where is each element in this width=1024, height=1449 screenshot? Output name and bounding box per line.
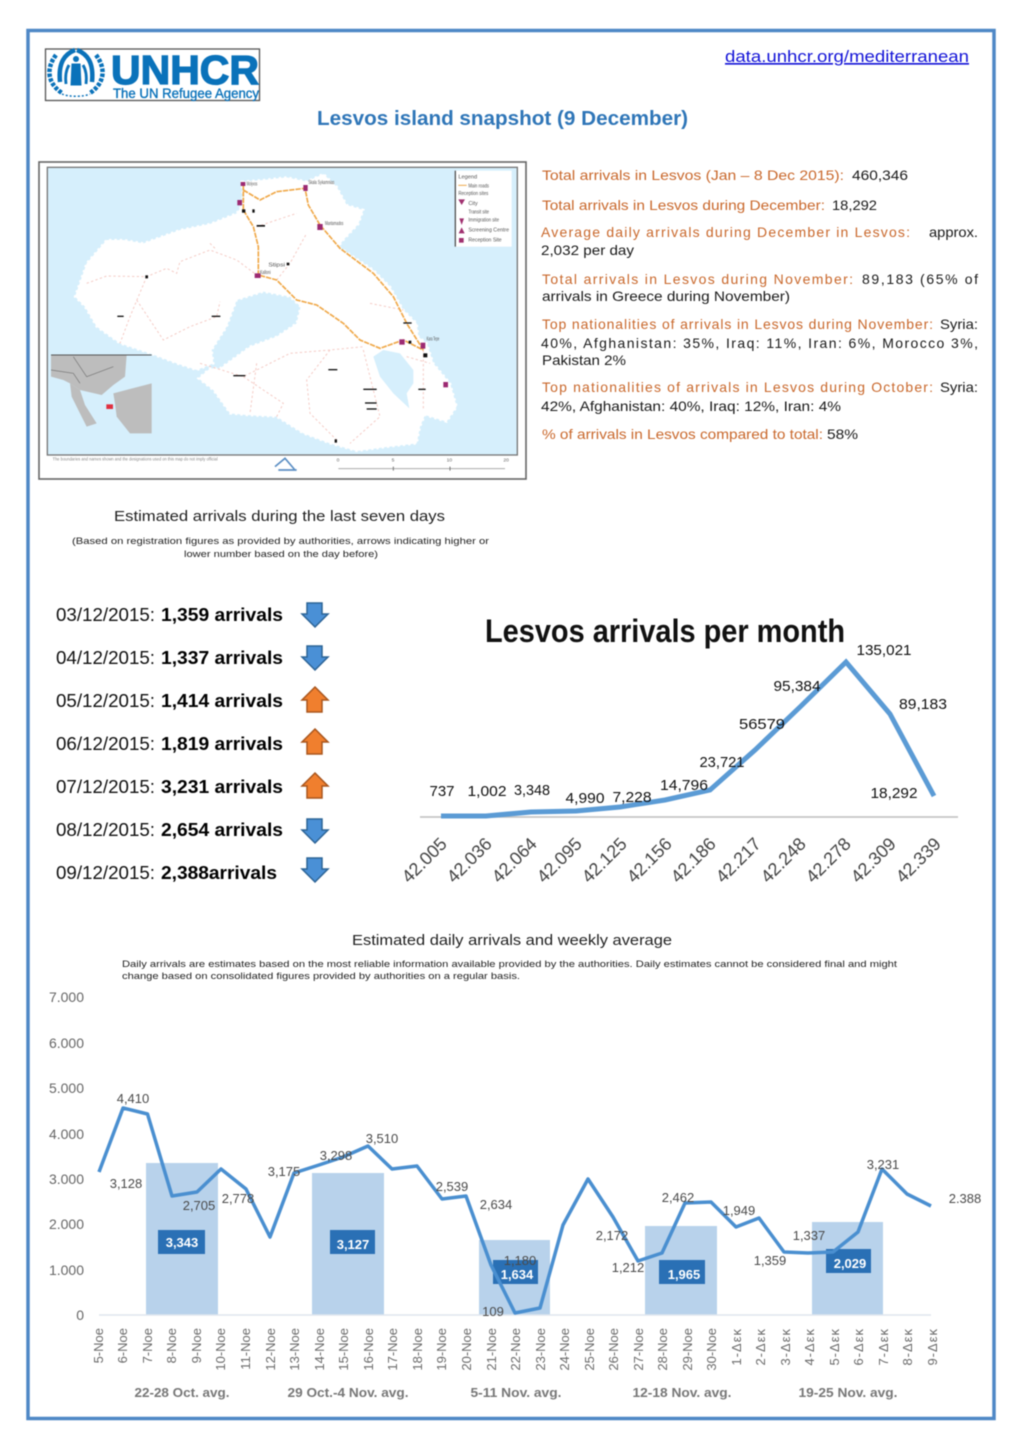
chart data labels: 1,002 [468,783,506,800]
panel: map of Lesvos [39,162,526,479]
date axis labels: 12-Noe [263,1328,278,1371]
note: last seven days [72,536,489,560]
date axis labels: 24-Noe [557,1328,572,1371]
y axis labels: 1.000 [49,1262,84,1278]
note: daily arrivals: change based on consolidated figures provided by authorities on a regular basis. [122,971,520,982]
y axis labels: 7.000 [49,989,84,1005]
date axis labels: 8-Noe [164,1328,179,1363]
fact: October nationalities: Syria: [940,379,978,395]
date axis labels: 25-Noe [582,1328,597,1371]
map towns [117,209,427,443]
weekly average axis labels [134,1385,898,1400]
daily data labels: 4,410 [117,1091,149,1106]
map legend: Reception Site [468,238,502,244]
chart axis [420,816,958,818]
y axis labels: 3.000 [49,1171,84,1187]
map footer note: The boundaries and names shown and the designations used on this map do not imply official [53,457,218,462]
map scale bar: 5 [392,458,395,464]
date axis labels: 17-Noe [385,1328,400,1371]
map island [75,174,457,451]
daily data labels: 2,172 [596,1228,628,1243]
map legend: Screening Centre [468,228,509,234]
fact: daily average: 2,032 per day [541,242,634,258]
daily data labels [110,1091,981,1319]
weekly average label boxes: 3,343 [166,1235,198,1250]
chart category labels: 42.064 [488,834,541,887]
heading: last seven days: Estimated arrivals during the last seven days [114,508,445,525]
date axis labels: 13-Noe [287,1328,302,1371]
icon: arrow down [302,819,328,843]
icon: arrow down [302,858,328,882]
daily data labels: 3,510 [366,1131,398,1146]
daily data labels: 109 [482,1304,504,1319]
icon: arrow down [302,603,328,627]
map scale bar: 10 [447,458,452,464]
y axis labels: 4.000 [49,1126,84,1142]
map legend: Transit site [468,209,489,215]
chart data labels: 95,384 [774,678,820,695]
fact: November arrivals: arrivals in Greece during November) [542,288,790,304]
daily data labels: 1,212 [612,1260,644,1275]
date axis labels: 27-Noe [631,1328,646,1371]
date axis labels: 26-Noe [606,1328,621,1371]
daily data labels: 2,705 [183,1198,215,1213]
date axis labels: 9-Δεκ [925,1328,940,1366]
date axis labels: 8-Δεκ [900,1328,915,1366]
fact: November arrivals: 89,183 (65% of [862,271,978,287]
icon: arrow up [302,687,328,712]
map markers [237,182,448,387]
map scale bar [337,458,509,471]
UNHCR logo [46,47,260,101]
date axis labels: 2-Δεκ [753,1328,768,1366]
fact: share of total: % of arrivals in Lesvos compared to total: [542,426,823,442]
fact: daily average: Average daily arrivals during December in Lesvos: [541,224,910,240]
daily data labels: 2,634 [480,1197,512,1212]
chart line [441,662,934,816]
row 08/12: 2,654 arrivals [161,820,283,840]
logo wordmark: UNHCR [111,47,259,93]
map Gulf of Gera [373,350,413,408]
map UNHCR mark [275,458,297,470]
date axis labels: 21-Noe [484,1328,499,1371]
fact: December arrivals: 18,292 [832,197,877,213]
title: Lesvos island snapshot (9 December) [317,107,688,130]
row 06/12: 1,819 arrivals [161,734,283,754]
map legend [455,171,512,247]
heading: daily arrivals: Estimated daily arrivals and weekly average [352,932,672,949]
row 04/12 [56,648,283,668]
fact: daily average [541,224,978,258]
daily data labels: 1,359 [754,1253,786,1268]
weekly average label boxes: 2,029 [834,1256,866,1271]
row 07/12: 07/12/2015: [56,777,155,797]
row 09/12 [56,863,277,883]
date axis labels: 4-Δεκ [802,1328,817,1366]
weekly average label boxes [158,1230,871,1284]
chart category labels: 42.278 [802,834,855,887]
fact: November nationalities: Top nationalities of arrivals in Lesvos during November: [542,316,933,332]
note: daily arrivals: Daily arrivals are estimates based on the most reliable information available provided by the authorities. Daily estimates cannot be considered final and might [122,959,897,970]
map inset [51,355,152,433]
map place names: Skala Sykamnias [308,180,335,186]
date axis labels: 14-Noe [312,1328,327,1371]
row 06/12: 06/12/2015: [56,734,155,754]
chart category labels: 42.036 [443,834,496,887]
chart category labels: 42.309 [847,834,900,887]
weekly average axis labels: 29 Oct.-4 Nov. avg. [288,1385,408,1400]
chart data labels [430,642,947,807]
chart category labels: 42.005 [398,834,451,887]
note: last seven days: (Based on registration figures as provided by authorities, arrows indicating higher or [72,536,489,547]
map legend: City [468,201,478,207]
date axis labels: 20-Noe [459,1328,474,1371]
row 05/12: 1,414 arrivals [161,691,283,711]
panel: seven-day arrivals list [56,603,328,883]
date axis labels: 3-Δεκ [778,1328,793,1366]
y axis labels: 5.000 [49,1080,84,1096]
y axis labels: 2.000 [49,1216,84,1232]
fact: November nationalities: Syria: [940,316,978,332]
map main roads [243,185,423,350]
row 08/12: 08/12/2015: [56,820,155,840]
map legend: Legend [458,174,477,180]
chart data labels: 135,021 [856,642,912,659]
icon: arrow up [302,729,328,754]
chart category labels: 42.095 [533,834,586,887]
chart data labels: 89,183 [899,696,947,713]
weekly average label boxes: 1,634 [501,1267,534,1282]
fact: November arrivals: Total arrivals in Lesvos during November: [542,271,853,287]
weekly average bars [146,1163,883,1315]
row 08/12 [56,820,283,840]
axis line [99,1314,931,1316]
daily arrivals line [99,1108,931,1313]
date axis labels: 6-Δεκ [851,1328,866,1366]
date axis labels: 30-Noe [704,1328,719,1371]
note: daily arrivals [122,959,897,982]
date axis labels: 9-Noe [189,1328,204,1363]
logo tagline: The UN Refugee Agency [113,85,259,101]
date axis labels: 7-Noe [140,1328,155,1363]
chart data labels: 56579 [739,716,785,733]
row 03/12 [56,605,283,625]
date axis labels: 23-Noe [533,1328,548,1371]
map place names: Kara Tepe [427,337,439,343]
y axis labels: 6.000 [49,1035,84,1051]
map legend: Immigration site [468,218,499,224]
link: data.unhcr.org/mediterranean [725,48,969,66]
daily data labels: 3,231 [867,1157,899,1172]
icon: UNHCR emblem [49,50,103,96]
date axis labels: 16-Noe [361,1328,376,1371]
date axis labels: 19-Noe [434,1328,449,1371]
fact: December arrivals: Total arrivals in Lesvos during December: [542,197,825,213]
weekly average label boxes: 1,965 [668,1267,700,1282]
fact: November nationalities: Pakistan 2% [542,352,626,368]
map sea [47,167,517,455]
map legend: Reception sites [458,191,488,197]
chart data labels: 737 [430,783,454,800]
y axis labels: 0 [76,1307,84,1323]
row 05/12: 05/12/2015: [56,691,155,711]
weekly average axis labels: 22-28 Oct. avg. [134,1385,230,1400]
date axis labels: 5-Noe [91,1328,106,1363]
date axis labels: 1-Δεκ [729,1328,744,1366]
weekly average axis labels: 19-25 Nov. avg. [798,1385,898,1400]
note: last seven days: lower number based on the day before) [184,549,378,560]
chart category labels: 42.339 [892,834,945,887]
date axis labels: 15-Noe [336,1328,351,1371]
fact: November nationalities: 40%, Afghanistan: 35%, Iraq: 11%, Iran: 6%, Morocco 3%, [541,335,978,351]
map legend: Main roads [468,183,489,189]
icon: arrow up [302,773,328,798]
daily data labels: 3,298 [320,1148,352,1163]
chart category labels: 42.248 [757,834,810,887]
fact: total arrivals: 460,346 [852,167,908,183]
chart category labels [398,834,945,887]
map place names: Mantamados [325,221,344,227]
row 05/12 [56,691,283,711]
chart data labels: 18,292 [870,785,918,802]
chart category labels: 42.125 [578,834,631,887]
date axis labels: 29-Noe [680,1328,695,1371]
chart category labels: 42.217 [712,834,765,887]
daily data labels: 1,180 [504,1253,536,1268]
date axis labels: 6-Noe [115,1328,130,1363]
date axis labels: 10-Noe [213,1328,228,1371]
daily data labels: 3,175 [268,1164,300,1179]
fact: October nationalities: Top nationalities of arrivals in Lesvos during October: [542,379,933,395]
daily data labels: 1,949 [723,1203,755,1218]
chart category labels: 42.156 [623,834,676,887]
map scale bar: 20 [503,458,509,464]
fact: share of total: 58% [827,426,858,442]
panel: key figures text [541,167,978,442]
chart: daily arrivals and weekly average [49,989,981,1400]
chart data labels: 4,990 [566,790,604,807]
icon: arrow down [302,646,328,670]
row 09/12: 09/12/2015: [56,863,155,883]
row 04/12: 04/12/2015: [56,648,155,668]
fact: November nationalities [541,316,978,368]
daily data labels: 1,337 [793,1228,825,1243]
chart title: Lesvos arrivals per month [485,613,845,649]
chart data labels: 14,796 [660,777,708,794]
map place names [247,180,439,343]
map place names: Stipsi [268,263,285,269]
row 07/12 [56,777,283,797]
row 03/12: 1,359 arrivals [161,605,283,625]
y axis labels [49,989,84,1323]
map place names: Kalloni [260,270,271,276]
fact: November arrivals [542,271,978,304]
date axis labels: 11-Noe [238,1328,253,1370]
date axis labels: 22-Noe [508,1328,523,1371]
chart data labels: 3,348 [514,782,550,799]
map place names: Molyvos [247,181,258,187]
chart: Lesvos arrivals per month [398,613,958,887]
chart data labels: 7,228 [612,789,652,806]
weekly average label boxes: 3,127 [337,1237,369,1252]
date axis labels: 18-Noe [410,1328,425,1371]
daily data labels: 2,778 [222,1191,254,1206]
chart data labels: 23,721 [700,754,744,771]
row 09/12: 2,388arrivals [161,863,277,883]
fact: October nationalities: 42%, Afghanistan: 40%, Iraq: 12%, Iran: 4% [541,398,841,414]
row 07/12: 3,231 arrivals [161,777,283,797]
date axis labels: 7-Δεκ [876,1328,891,1366]
fact: total arrivals: Total arrivals in Lesvos (Jan – 8 Dec 2015): [542,167,844,183]
fact: daily average: approx. [929,224,978,240]
daily data labels: 2,462 [662,1190,694,1205]
daily data labels: 3,128 [110,1176,142,1191]
chart category labels: 42.186 [667,834,720,887]
weekly average axis labels: 5-11 Nov. avg. [470,1385,562,1400]
row 03/12: 03/12/2015: [56,605,155,625]
date axis labels [91,1328,940,1371]
row 06/12 [56,734,283,754]
map scale bar: 0 [337,458,340,464]
row 04/12: 1,337 arrivals [161,648,283,668]
weekly average axis labels: 12-18 Nov. avg. [632,1385,732,1400]
daily data labels: 2,539 [436,1179,468,1194]
fact: October nationalities [541,379,978,414]
date axis labels: 28-Noe [655,1328,670,1371]
map minor roads [87,213,430,443]
daily data labels: 2.388 [949,1191,981,1206]
date axis labels: 5-Δεκ [827,1328,842,1366]
